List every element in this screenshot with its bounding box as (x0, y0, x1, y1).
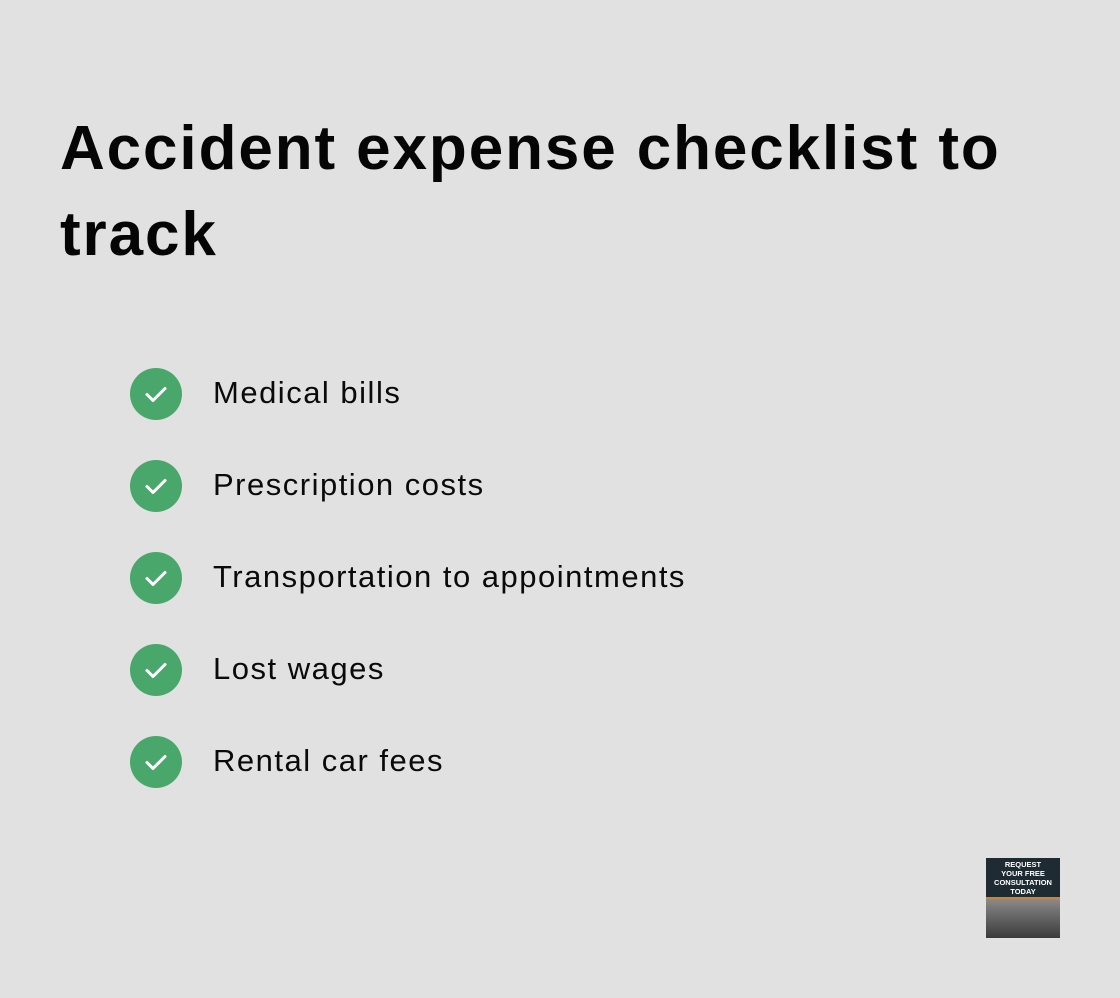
checklist item: medical bills: Medical bills (213, 375, 401, 410)
title: Accident expense checklist to track (60, 114, 1001, 269)
logo: consultation badge (986, 858, 1060, 938)
logo: consultation badge: TODAY (1010, 887, 1036, 896)
checklist item: medical bills (130, 368, 401, 420)
logo: consultation badge: CONSULTATION (994, 878, 1052, 887)
checklist item: lost wages: Lost wages (213, 651, 385, 686)
checklist item: transportation: Transportation to appointments (213, 559, 686, 594)
logo: consultation badge: REQUEST (1005, 860, 1041, 869)
checklist item: transportation (130, 552, 686, 604)
icon: check (130, 736, 182, 788)
checklist item: lost wages (130, 644, 385, 696)
checklist item: rental car (130, 736, 444, 788)
checklist item: prescription (130, 460, 485, 512)
icon: check (130, 368, 182, 420)
checklist item: rental car: Rental car fees (213, 743, 444, 778)
icon: check (130, 460, 182, 512)
icon: check (130, 644, 182, 696)
icon: check (130, 552, 182, 604)
logo: consultation badge: YOUR FREE (1001, 869, 1045, 878)
checklist item: prescription: Prescription costs (213, 467, 485, 502)
